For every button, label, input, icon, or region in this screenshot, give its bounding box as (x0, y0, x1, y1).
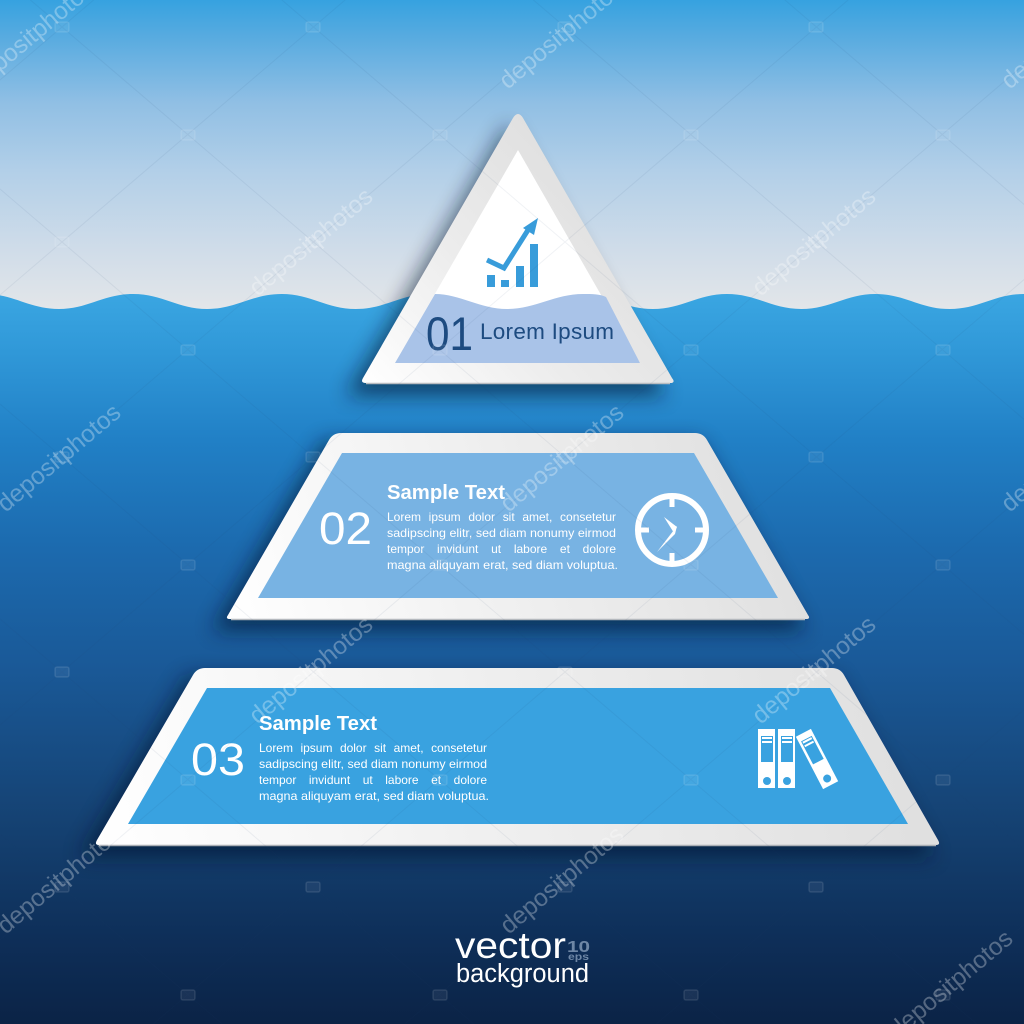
icon: binders (758, 729, 838, 789)
inner wave panel (395, 294, 640, 363)
inner white panel (395, 150, 640, 363)
text block: sample text 03: tempor invidunt ut labore et dolore (259, 773, 487, 787)
text block: sample text 03: sadipscing elitr, sed diam nonumy eirmod (259, 757, 487, 771)
text block: sample text 02: tempor invidunt ut labore et dolore (387, 542, 616, 556)
text block: sample text 02: sadipscing elitr, sed diam nonumy eirmod (387, 526, 616, 540)
footer: vector background badge: 10 (567, 939, 590, 956)
footer: vector background badge (455, 925, 590, 988)
text block: sample text 03: Sample Text (259, 713, 377, 735)
heading: Lorem Ipsum: Lorem Ipsum (480, 319, 614, 344)
text block: sample text 02: Lorem ipsum dolor sit amet, consetetur (387, 510, 616, 524)
text block: sample text 03: magna aliquyam erat, sed diam voluptua. (259, 789, 489, 803)
footer: vector background badge: eps (568, 952, 590, 963)
pyramid tier 3: wide trapezoid (80, 668, 939, 857)
icon: clock (638, 496, 706, 564)
sea with wavy surface (0, 294, 1024, 1024)
text block: sample text 02: Sample Text (387, 482, 505, 504)
watermark overlay: depositphotos (747, 183, 881, 302)
number 02: 02 (319, 503, 372, 554)
pyramid tier 2: trapezoid (212, 433, 809, 631)
sky background (0, 0, 1024, 320)
watermark overlay: depositphotos (244, 611, 378, 730)
pyramid tier 1: triangle (346, 114, 674, 396)
footer: vector background badge: vector (455, 925, 566, 966)
number 01: 01 (426, 307, 473, 360)
text block: sample text 02: magna aliquyam erat, sed diam voluptua. (387, 558, 618, 572)
watermark overlay: depositphotos (495, 399, 629, 518)
text block: sample text 03 (259, 713, 489, 803)
number 03: 03 (191, 734, 245, 785)
icon: rising bar chart with arrow (487, 218, 538, 287)
watermark overlay: depositphotos (747, 611, 881, 730)
watermark overlay: depositphotos (244, 183, 378, 302)
inner blue panel (128, 688, 908, 824)
inner blue panel (258, 453, 778, 598)
watermark overlay: depositphotos (495, 821, 629, 940)
footer: vector background badge: background (456, 960, 589, 988)
text block: sample text 02 (387, 482, 618, 572)
text block: sample text 03: Lorem ipsum dolor sit amet, consetetur (259, 741, 487, 755)
